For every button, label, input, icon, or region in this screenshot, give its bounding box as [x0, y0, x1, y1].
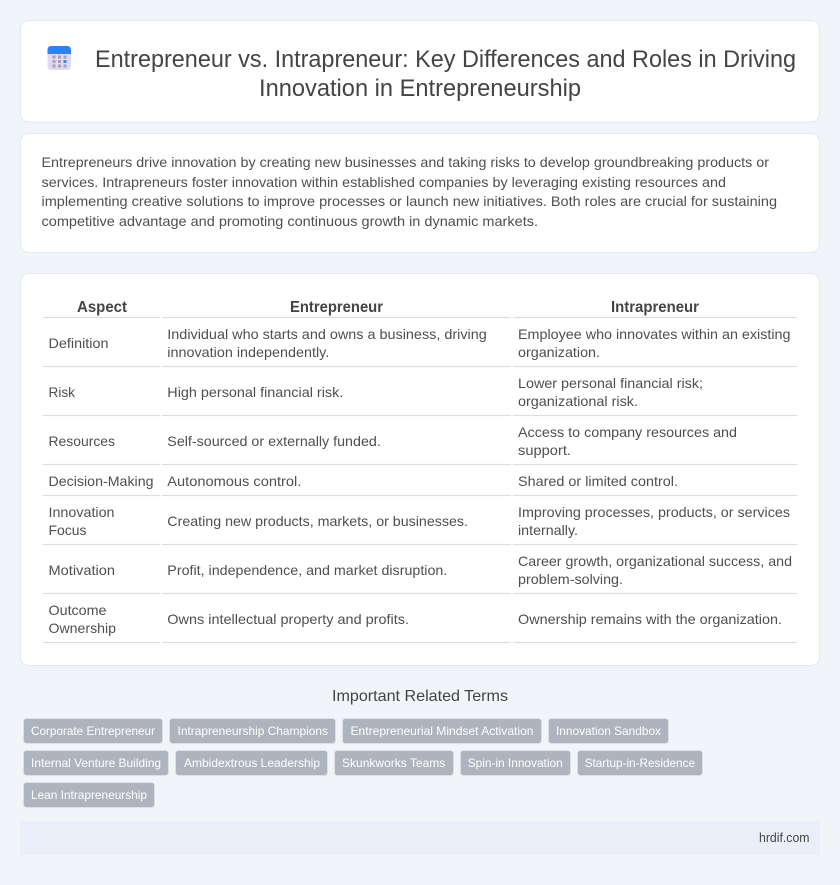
tag: entrepreneurial mindset activation [342, 718, 542, 744]
row: definition: Definition [48, 335, 108, 351]
panel: introduction [20, 134, 820, 252]
row: motivation [48, 553, 792, 587]
panel: title card [20, 20, 820, 122]
tag: skunkworks teams [334, 750, 454, 776]
row: innovation focus: Improving processes, products, or services [518, 504, 790, 520]
row: resources: Self-sourced or externally funded. [167, 433, 381, 449]
intro text block: implementing creative solutions to improve processes or launch new initiatives. Both roles are crucial for sustaining [42, 193, 777, 209]
panel: comparison table [20, 274, 820, 666]
row: outcome ownership [48, 602, 782, 636]
tag: ambidextrous leadership: Ambidextrous Leadership [184, 756, 320, 770]
row: risk [48, 375, 703, 409]
row: risk: High personal financial risk. [167, 384, 343, 400]
row: risk: organizational risk. [518, 393, 638, 409]
tag: lean intrapreneurship: Lean Intrapreneurship [31, 788, 147, 802]
title: Entrepreneur vs. Intrapreneur: Key Differences and Roles in Driving [95, 46, 796, 73]
row: decision-making: Autonomous control. [167, 473, 301, 489]
row: innovation focus: Innovation [48, 504, 114, 520]
tag: intrapreneurship champions: Intrapreneurship Champions [178, 724, 328, 738]
row: decision-making: Shared or limited control. [518, 473, 678, 489]
row: definition: Individual who starts and owns a business, driving [167, 326, 487, 342]
panel: related term tags [24, 718, 702, 808]
row: resources: support. [518, 442, 571, 458]
tag: skunkworks teams: Skunkworks Teams [342, 756, 445, 770]
row: definition [48, 326, 790, 360]
row: definition: Employee who innovates within an existing [518, 326, 790, 342]
intro text block: competitive advantage and promoting continuous growth in dynamic markets. [42, 213, 538, 229]
table header [77, 299, 699, 316]
row: motivation: Motivation [48, 562, 115, 578]
tag: intrapreneurship champions [170, 718, 336, 744]
row: outcome ownership: Ownership [48, 620, 116, 636]
tag: internal venture building: Internal Venture Building [31, 756, 161, 770]
intro text block: Entrepreneurs drive innovation by creating new businesses and taking risks to develop groundbreaking products or [42, 154, 769, 170]
footer source text: hrdif.com [759, 831, 810, 845]
row: outcome ownership: Owns intellectual property and profits. [167, 611, 409, 627]
tag: startup-in-residence: Startup-in-Residence [585, 756, 695, 770]
row: definition: organization. [518, 344, 600, 360]
tag: spin-in innovation [460, 750, 570, 776]
row: innovation focus: Focus [48, 522, 86, 538]
row: motivation: Career growth, organizational success, and [518, 553, 792, 569]
tag: spin-in innovation: Spin-in Innovation [468, 756, 563, 770]
tag: innovation sandbox [548, 718, 668, 744]
tag: innovation sandbox: Innovation Sandbox [556, 724, 661, 738]
row: innovation focus [48, 504, 790, 538]
row: decision-making: Decision-Making [48, 473, 154, 489]
tag: internal venture building [24, 750, 168, 776]
tag: entrepreneurial mindset activation: Entrepreneurial Mindset Activation [350, 724, 534, 738]
tag: ambidextrous leadership [176, 750, 328, 776]
intro text block [42, 154, 777, 229]
row: innovation focus: Creating new products, markets, or businesses. [167, 513, 468, 529]
tag: corporate entrepreneur [24, 718, 162, 744]
table header: Aspect [77, 299, 127, 316]
row: motivation: Profit, independence, and market disruption. [167, 562, 447, 578]
tag: startup-in-residence [578, 750, 702, 776]
row: innovation focus: internally. [518, 522, 578, 538]
row: resources [48, 424, 737, 458]
tag: lean intrapreneurship [24, 782, 154, 808]
row: outcome ownership: Outcome [48, 602, 107, 618]
row: resources: Access to company resources and [518, 424, 737, 440]
title: Innovation in Entrepreneurship [259, 75, 581, 102]
title [95, 46, 796, 102]
row: risk: Risk [48, 384, 76, 400]
intro text block: services. Intrapreneurs foster innovation within established companies by leveraging existing resources and [42, 174, 726, 190]
row: outcome ownership: Ownership remains with the organization. [518, 611, 782, 627]
heading: important related terms: Important Related Terms [332, 688, 508, 705]
footer [20, 821, 820, 855]
tag: corporate entrepreneur: Corporate Entrepreneur [31, 724, 155, 738]
row: motivation: problem-solving. [518, 571, 623, 587]
row: risk: Lower personal financial risk; [518, 375, 703, 391]
icon: calendar [48, 46, 71, 70]
row: definition: innovation independently. [167, 344, 329, 360]
table header: Intrapreneur [611, 299, 699, 316]
row: decision-making [48, 473, 678, 489]
table header: Entrepreneur [290, 299, 383, 316]
row: resources: Resources [48, 433, 115, 449]
